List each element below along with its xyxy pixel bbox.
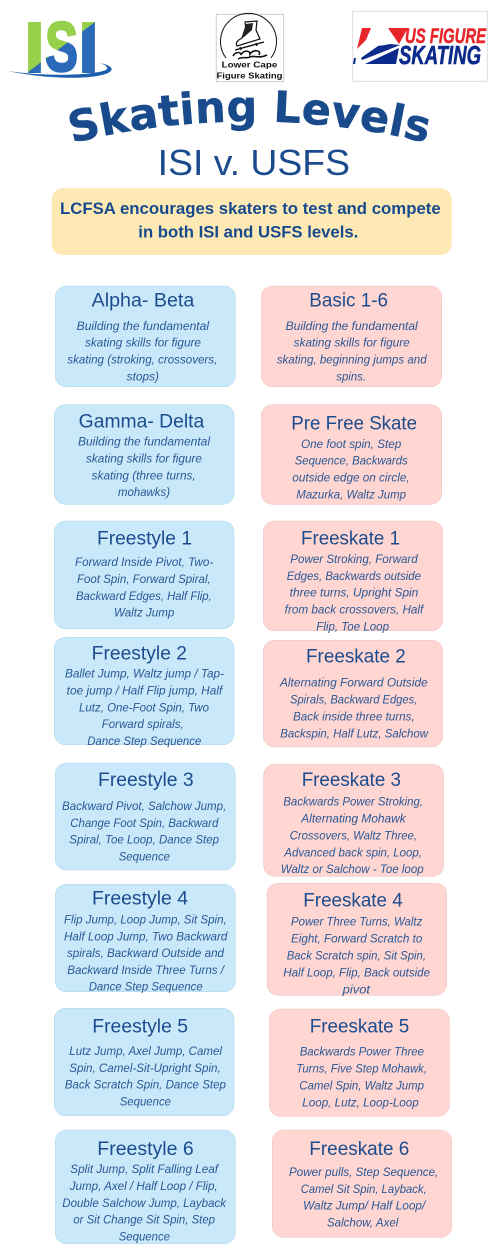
description: Building the fundamental xyxy=(77,320,209,333)
heading: Gamma- Delta xyxy=(79,412,205,433)
description: Back inside three turns, xyxy=(293,710,415,723)
description: mohawks) xyxy=(118,486,170,499)
description xyxy=(296,1046,427,1109)
description: skating, beginning jumps and xyxy=(277,353,427,366)
description: Power pulls, Step Sequence, xyxy=(289,1166,438,1179)
description xyxy=(64,913,228,994)
description: Half Loop, Flip, Back outside xyxy=(283,966,430,979)
description: Sequence xyxy=(119,1231,170,1244)
description: Building the fundamental xyxy=(78,436,210,449)
description xyxy=(65,667,224,748)
panel: Freestyle 2 xyxy=(54,637,234,748)
heading: Freeskate 2 xyxy=(306,646,406,667)
description: Alternating Mohawk xyxy=(300,813,407,826)
heading: Freeskate 1 xyxy=(301,529,400,550)
description xyxy=(279,677,430,740)
description: Dance Step Sequence xyxy=(89,981,203,994)
heading: Freestyle 4 xyxy=(92,888,188,909)
description xyxy=(283,916,430,996)
description: Alternating Forward Outside xyxy=(279,677,428,690)
description: Waltz Jump/ Half Loop/ xyxy=(303,1200,427,1213)
panel: Alpha- Beta xyxy=(55,286,235,387)
panel: Freestyle 1 xyxy=(54,521,234,629)
description xyxy=(78,436,210,499)
description: Crossovers, Waltz Three, xyxy=(290,829,417,842)
callout: encouragement xyxy=(52,188,452,255)
description xyxy=(285,553,425,633)
heading: Basic 1-6 xyxy=(309,291,388,312)
logo: US Figure Skating xyxy=(353,11,487,81)
panel: Freeskate 6 xyxy=(272,1130,452,1237)
description: Half Loop Jump, Two Backward xyxy=(64,930,228,943)
heading: Freeskate 3 xyxy=(302,770,401,791)
panel: Freestyle 5 xyxy=(54,1008,234,1116)
logo: Lower Cape Figure Skating: Lower Cape xyxy=(222,60,278,70)
description: Foot Spin, Forward Spiral, xyxy=(77,573,211,586)
description: Eight, Forward Scratch to xyxy=(291,933,423,946)
description: skating (three turns, xyxy=(92,469,196,482)
description: Backward Pivot, Salchow Jump, xyxy=(62,800,226,813)
description: Waltz Jump xyxy=(114,607,175,620)
logo: ISI: S xyxy=(45,8,78,86)
logo: Lower Cape Figure Skating: Figure Skating xyxy=(216,71,282,81)
description: toe jump / Half Flip jump, Half xyxy=(67,684,224,697)
panel: Freestyle 3 xyxy=(55,763,235,870)
description: Camel Spin, Waltz Jump xyxy=(299,1079,424,1092)
description: Salchow, Axel xyxy=(327,1217,399,1230)
description: Sequence, Backwards xyxy=(295,455,408,468)
description: three turns, Upright Spin xyxy=(290,587,418,600)
description xyxy=(67,320,217,383)
panel: Freeskate 3 xyxy=(264,764,444,876)
description: Lutz Jump, Axel Jump, Camel xyxy=(69,1045,222,1058)
description: Spirals, Backward Edges, xyxy=(290,694,417,707)
description: Lutz, One-Foot Spin, Two xyxy=(79,701,209,714)
heading: Freeskate 4 xyxy=(303,891,403,912)
description: or Sit Change Sit Spin, Step xyxy=(73,1214,215,1227)
logo: ISI: I xyxy=(25,8,44,86)
description: Back Scratch spin, Sit Spin, xyxy=(287,949,426,962)
heading: Pre Free Skate xyxy=(291,414,417,435)
description xyxy=(62,1163,227,1244)
logo: ISI: I xyxy=(79,8,98,86)
description: Backward Edges, Half Flip, xyxy=(76,590,212,603)
description: Loop, Lutz, Loop-Loop xyxy=(302,1096,419,1109)
panel: Freeskate 4 xyxy=(267,883,447,996)
description: Spiral, Toe Loop, Dance Step xyxy=(69,834,219,847)
description: Advanced back spin, Loop, xyxy=(283,846,422,859)
description: Building the fundamental xyxy=(286,320,418,333)
description: Flip, Toe Loop xyxy=(316,620,389,633)
description: Dance Step Sequence xyxy=(87,735,202,748)
panel: Pre Free Skate xyxy=(261,405,442,504)
description: One foot spin, Step xyxy=(301,438,402,451)
panel: Freestyle 6 xyxy=(55,1130,235,1244)
description: Edges, Backwards outside xyxy=(287,570,421,583)
heading: Freeskate 5 xyxy=(310,1017,409,1038)
logo: Lower Cape Figure Skating xyxy=(216,13,284,82)
description: from back crossovers, Half xyxy=(285,604,425,617)
title: Skating Levels: Skating Levels xyxy=(70,90,429,142)
heading: Freestyle 1 xyxy=(97,529,192,550)
description xyxy=(277,320,427,383)
heading: Freeskate 6 xyxy=(309,1139,409,1160)
heading: Alpha- Beta xyxy=(92,291,195,312)
description: skating (stroking, crossovers, xyxy=(67,353,217,366)
description: Split Jump, Split Falling Leaf xyxy=(70,1163,220,1176)
description: spins. xyxy=(336,370,366,383)
panel: Freeskate 1 xyxy=(263,521,443,633)
panel: Basic 1-6 xyxy=(261,286,442,387)
description: pivot xyxy=(342,983,371,996)
description: Ballet Jump, Waltz jump / Tap- xyxy=(65,667,224,680)
heading: Freestyle 2 xyxy=(92,643,187,664)
description xyxy=(62,800,226,864)
panel: Gamma- Delta xyxy=(54,405,234,504)
heading: Freestyle 6 xyxy=(97,1139,194,1160)
description: Change Foot Spin, Backward xyxy=(70,817,219,830)
description: skating skills for figure xyxy=(85,337,201,350)
description: Sequence xyxy=(120,1096,171,1109)
description: skating skills for figure xyxy=(294,337,410,350)
description: Sequence xyxy=(119,851,170,864)
description xyxy=(75,556,213,620)
description: outside edge on circle, xyxy=(292,472,410,485)
description: Flip Jump, Loop Jump, Sit Spin, xyxy=(64,913,227,926)
description: Turns, Five Step Mohawk, xyxy=(296,1063,427,1076)
description xyxy=(292,438,410,502)
panel: Freestyle 4 xyxy=(55,884,235,994)
description: stops) xyxy=(127,370,159,383)
description: Double Salchow Jump, Layback xyxy=(62,1197,227,1210)
panel: Freeskate 5 xyxy=(269,1009,449,1116)
subtitle: ISI v. USFS: ISI v. USFS xyxy=(158,142,350,183)
description: Backward Inside Three Turns / xyxy=(67,964,226,977)
description: Backwards Power Stroking, xyxy=(283,796,423,809)
description xyxy=(281,796,424,876)
description xyxy=(65,1045,226,1109)
description: Forward spirals, xyxy=(102,718,184,731)
panel: Freeskate 2 xyxy=(263,640,443,747)
callout: encouragement: LCFSA encourages skaters to test and compete xyxy=(60,199,441,218)
description: Mazurka, Waltz Jump xyxy=(296,489,406,502)
description: spirals, Backward Outside and xyxy=(67,947,224,960)
description: Backwards Power Three xyxy=(300,1046,424,1059)
description: Spin, Camel-Sit-Upright Spin, xyxy=(69,1062,221,1075)
callout: encouragement: in both ISI and USFS levels. xyxy=(138,222,358,241)
heading: Freestyle 5 xyxy=(92,1017,188,1038)
description: Camel Sit Spin, Layback, xyxy=(301,1183,427,1196)
description: Back Scratch Spin, Dance Step xyxy=(65,1079,226,1092)
description: Waltz or Salchow - Toe loop xyxy=(281,863,424,876)
description: Forward Inside Pivot, Two- xyxy=(75,556,213,569)
description xyxy=(289,1166,438,1230)
description: Power Stroking, Forward xyxy=(290,553,418,566)
description: Backspin, Half Lutz, Salchow xyxy=(280,727,430,740)
description: Jump, Axel / Half Loop / Flip, xyxy=(69,1180,218,1193)
logo: ISI xyxy=(8,8,112,86)
heading: Freestyle 3 xyxy=(98,770,194,791)
description: Power Three Turns, Waltz xyxy=(291,916,422,929)
description: skating skills for figure xyxy=(86,452,202,465)
